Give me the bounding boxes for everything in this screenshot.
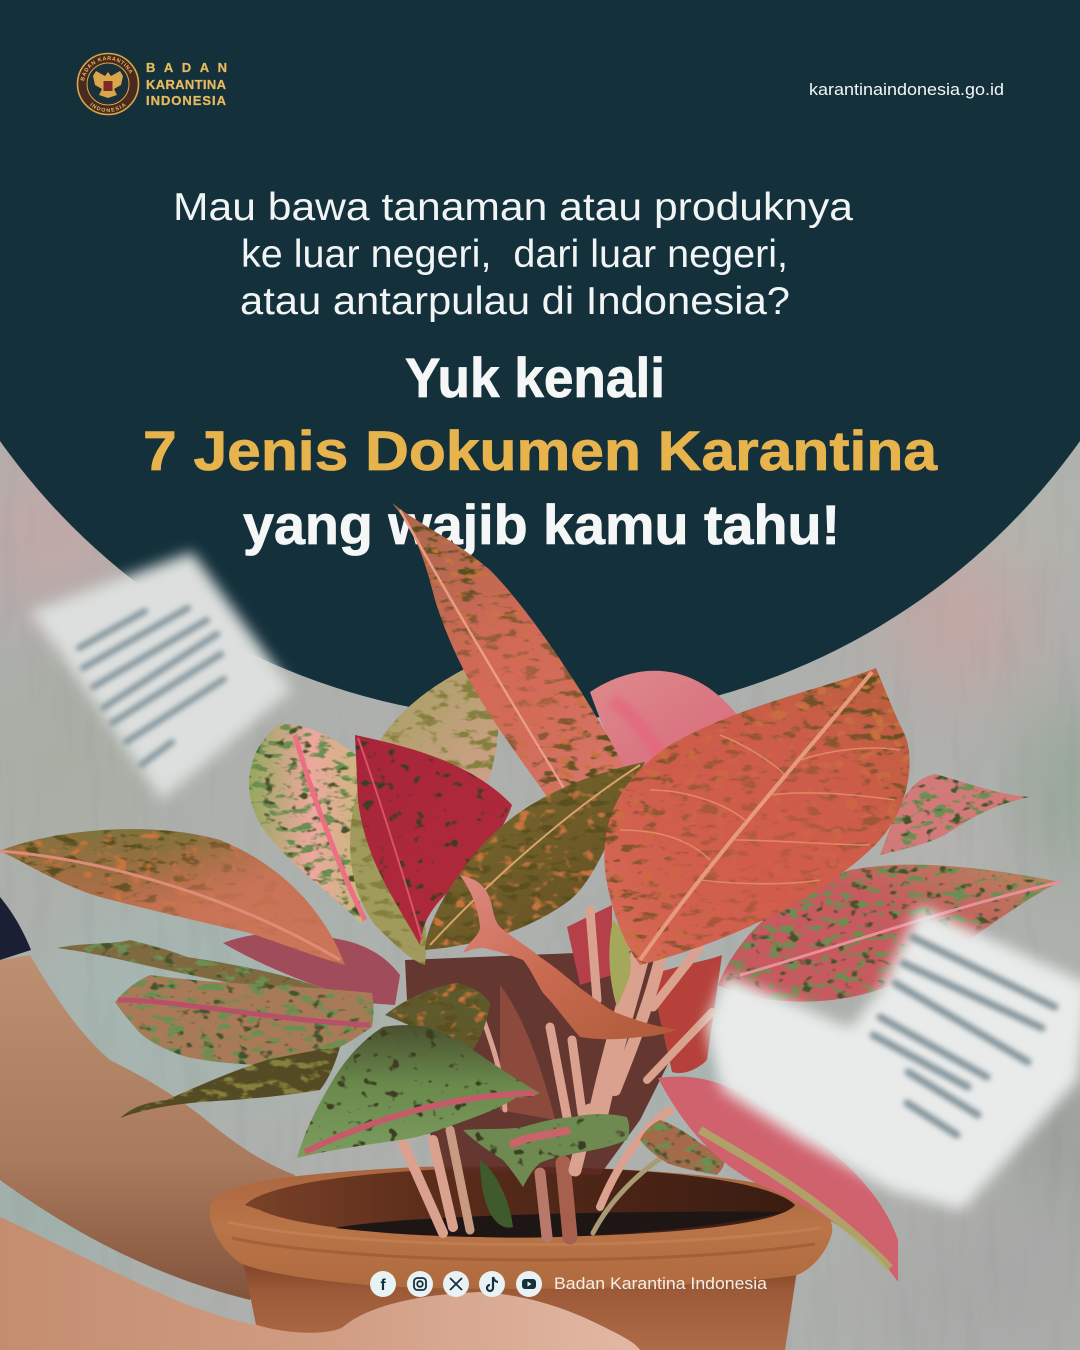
leaf: lower right long pink	[658, 1077, 898, 1282]
leaf: olive fold	[350, 780, 426, 965]
website url: karantinaindonesia.go.id	[809, 80, 1004, 99]
leaf: back magenta behind left	[223, 933, 400, 1005]
intro question text	[173, 186, 853, 323]
leaf: thin lower left	[57, 940, 327, 995]
icon: youtube	[516, 1271, 542, 1297]
leaf: pale green upright	[609, 920, 631, 1007]
leaf: variegated left	[249, 724, 365, 925]
icon: Badan Karantina Indonesia logo: INDONESIA	[90, 102, 126, 112]
footer account name: Badan Karantina Indonesia	[554, 1274, 768, 1293]
social media footer	[370, 1271, 768, 1297]
leaf: front small	[463, 1114, 629, 1187]
dark circle header panel	[0, 0, 1080, 720]
intro question text: ke luar negeri, dari luar negeri,	[241, 233, 788, 276]
floating document: left	[30, 552, 292, 800]
leaf: center dark	[425, 762, 645, 950]
icon: tiktok	[479, 1271, 505, 1297]
icon: x	[443, 1271, 469, 1297]
leaf: crimson	[355, 735, 512, 945]
logo wordmark: INDONESIA	[146, 93, 227, 108]
leaf: low right behind	[640, 1120, 725, 1175]
headline: 7 Jenis Dokumen Karantina	[143, 419, 938, 482]
leaf: far right small	[880, 774, 1030, 855]
logo wordmark: KARANTINA	[146, 77, 227, 92]
upper arm holding pot	[0, 897, 295, 1300]
leaf: large left	[0, 829, 345, 965]
leaf: broad lower left	[115, 975, 374, 1065]
center filler: dark foliage and shade	[405, 905, 722, 1175]
headline	[143, 346, 938, 556]
leaf: back pink right	[590, 671, 738, 775]
plant stems	[403, 910, 712, 1237]
leaf: small salmon center	[460, 875, 677, 1039]
leaf: dark green base	[480, 1160, 513, 1228]
icon: facebook	[370, 1271, 396, 1297]
leaf: back olive	[380, 658, 499, 782]
leaf: lower right pink	[718, 865, 1060, 1002]
leaf: tall top	[392, 503, 625, 798]
plant: aglaonema	[0, 503, 1060, 1282]
leaf: dark olive low left	[120, 1047, 340, 1118]
headline: Yuk kenali	[405, 346, 665, 409]
headline: yang wajib kamu tahu!	[243, 493, 840, 556]
icon: instagram	[407, 1271, 433, 1297]
floating document: right	[706, 906, 1080, 1210]
leaf: front green red	[297, 1025, 540, 1158]
logo wordmark: BADAN	[146, 60, 227, 75]
icon: facebook: f	[380, 1277, 386, 1294]
lower arm and hand under pot	[0, 1217, 640, 1350]
intro question text: atau antarpulau di Indonesia?	[240, 280, 790, 323]
icon: Badan Karantina Indonesia logo	[76, 52, 140, 116]
icon: Badan Karantina Indonesia logo: BADAN KARANTINA	[80, 56, 132, 81]
leaf: mid dark	[385, 983, 490, 1050]
leaf: big orange right	[604, 668, 910, 965]
terracotta pot	[210, 1166, 832, 1350]
intro question text: Mau bawa tanaman atau produknya	[173, 186, 853, 229]
logo wordmark	[146, 60, 227, 108]
